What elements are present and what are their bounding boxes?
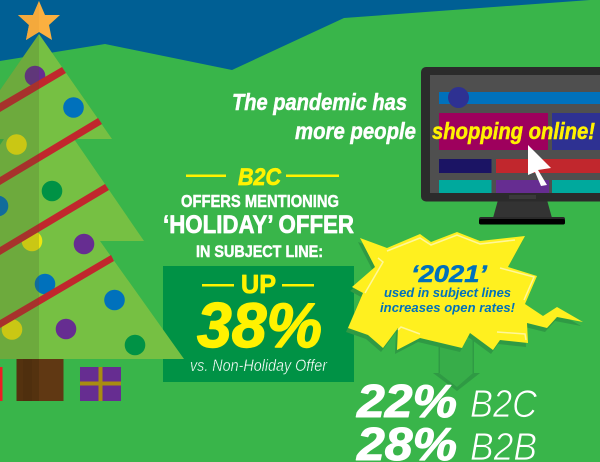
web page blocks on screen <box>439 87 600 193</box>
monitor frame <box>421 67 600 202</box>
panel background: up 38 percent <box>163 266 354 382</box>
subject line description: OFFERS MENTIONING <box>181 191 339 211</box>
subject line description: IN SUBJECT LINE: <box>196 243 323 261</box>
burst highlights <box>365 235 534 340</box>
tree trunk <box>16 359 64 401</box>
monitor power detail <box>509 195 536 199</box>
red garlands <box>0 67 114 328</box>
headline: pandemic shopping: more people <box>295 118 416 144</box>
subject line description: ‘HOLIDAY’ OFFER <box>163 211 354 239</box>
down arrow from burst to stats <box>433 340 480 391</box>
burst body <box>348 232 583 350</box>
callout: 2021 burst <box>346 232 583 354</box>
stat: 28 percent B2B <box>356 418 537 462</box>
B2C heading with rules: B2C <box>238 164 282 191</box>
shaded left half of tree <box>0 34 39 359</box>
headline: pandemic shopping <box>232 89 595 144</box>
star on top of tree <box>18 1 60 40</box>
stat: 22 percent B2C: B2C <box>470 383 538 426</box>
monitor screen <box>430 75 600 193</box>
subject line description <box>163 191 354 261</box>
UP label with rules: UP <box>241 269 276 299</box>
headline: pandemic shopping: The pandemic has <box>232 89 407 115</box>
burst caption: used in subject lines <box>384 285 511 300</box>
panel content: up 38 percent <box>190 269 328 375</box>
christmas tree illustration <box>0 1 184 401</box>
tree foliage tiers <box>0 34 184 359</box>
2021 label: ‘2021’ <box>411 261 487 288</box>
gift: purple with gold ribbon <box>80 367 121 401</box>
ornaments <box>0 66 145 355</box>
comparison caption: vs. Non-Holiday Offer <box>190 356 328 375</box>
gift: red, cropped at left edge <box>0 367 2 401</box>
stat: 22 percent B2C <box>356 375 538 427</box>
monitor base <box>479 217 565 224</box>
38 percent figure: 38% <box>197 291 322 361</box>
background: night sky above the hills <box>0 0 600 70</box>
burst caption: increases open rates! <box>380 300 516 315</box>
burst shadow <box>346 236 581 354</box>
monitor stand <box>493 200 552 218</box>
stat: 22 percent B2C: 22% <box>356 375 457 427</box>
computer monitor <box>421 67 600 224</box>
mouse cursor arrow <box>528 145 551 186</box>
burst caption <box>380 285 516 315</box>
